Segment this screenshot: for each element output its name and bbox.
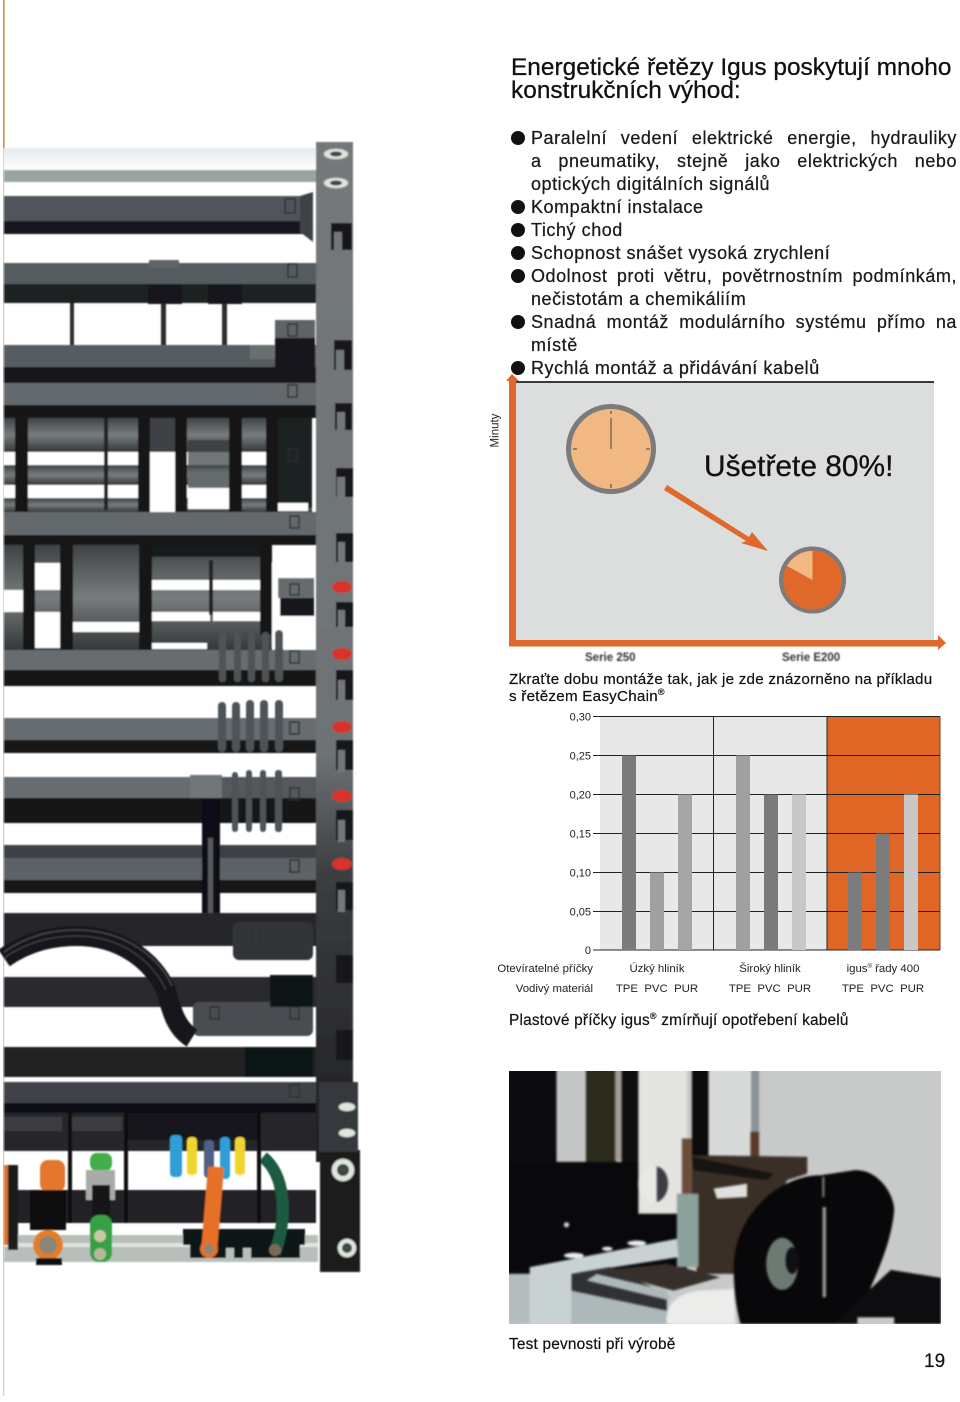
y axis values: 0,20 — [570, 790, 591, 802]
category labels: TPE PVC PUR — [842, 983, 924, 995]
chart: time saving clocks — [506, 374, 946, 664]
red markers — [332, 581, 352, 870]
side plate column — [316, 142, 360, 1272]
bullet: resistance: nečistotám a chemikáliím — [531, 289, 746, 309]
bar chart: cable wear — [497, 712, 940, 995]
chart caption: s řetězem EasyChain® — [509, 686, 665, 704]
bullet: fast cable fitting: Rychlá montáž a přidávání kabelů — [531, 358, 820, 378]
grey link and cable bundle lower — [4, 512, 316, 650]
category labels: TPE PVC PUR — [729, 983, 811, 995]
category labels: TPE PVC PUR — [616, 983, 698, 995]
y axis values: 0,15 — [570, 828, 591, 840]
chart panels — [600, 716, 940, 950]
arrow: saving — [664, 485, 768, 551]
category labels: Otevíratelné příčky — [497, 963, 593, 975]
y axis label: Minuty — [490, 414, 502, 447]
y axis values: 0,25 — [570, 750, 591, 762]
clock: after — [781, 548, 844, 612]
bullet: quiet operation: Tichý chod — [531, 220, 623, 240]
y axis values: 0,30 — [570, 712, 591, 724]
category labels: řady 400 — [872, 963, 919, 975]
y axis values: 0,10 — [570, 868, 591, 880]
photo: strength test — [509, 1071, 941, 1324]
category labels: Široký hliník — [739, 962, 801, 975]
y axis values: 0 — [585, 945, 591, 957]
bullet: resistance: Odolnost proti větru, povětrnostním podmínkám, — [531, 266, 957, 286]
chart caption — [509, 671, 932, 704]
bullet: resistance — [511, 266, 957, 309]
upper grey chain links — [4, 192, 316, 418]
bullet: modular assembly: Snadná montáž modulárního systému přímo na — [531, 312, 957, 332]
saving headline: Ušetřete 80%! — [704, 450, 893, 483]
mounting rail — [4, 1229, 318, 1262]
link end flares and window marks — [210, 199, 299, 1097]
bullet: modular assembly — [511, 312, 957, 355]
y axis values: 0,05 — [570, 906, 591, 918]
bullet: compact installation: Kompaktní instalace — [531, 197, 704, 217]
bullet: parallel routing: optických digitálních signálů — [531, 174, 770, 194]
category labels — [497, 962, 924, 995]
axes — [506, 374, 946, 650]
page number: 19 — [924, 1351, 945, 1372]
chart caption: Zkraťte dobu montáže tak, jak je zde znázorněno na příkladu — [509, 671, 932, 688]
category labels: igus — [847, 963, 867, 975]
category labels: ® — [867, 963, 872, 970]
heading: Energetické řetězy Igus poskytují mnoho — [511, 54, 951, 81]
dark lower links — [4, 913, 316, 1223]
cable bundle upper — [4, 414, 312, 512]
x axis labels: Serie E200 — [782, 652, 840, 664]
heading — [511, 54, 951, 104]
y axis values — [570, 712, 591, 957]
bullet: modular assembly: místě — [531, 335, 578, 355]
category labels: Úzký hliník — [629, 962, 685, 975]
bullet: parallel routing: a pneumatiky, stejně jako elektrických nebo — [531, 151, 957, 171]
plot background — [516, 382, 934, 640]
bullet: parallel routing: Paralelní vedení elektrické energie, hydrauliky — [531, 128, 957, 148]
photo caption: Test pevnosti při výrobě — [509, 1336, 675, 1353]
finned links — [4, 630, 316, 923]
category labels: Vodivý materiál — [516, 983, 593, 995]
bullet: high acceleration: Schopnost snášet vysoká zrychlení — [531, 243, 830, 263]
cables and clamps — [4, 1113, 283, 1265]
clock: before — [568, 406, 654, 492]
heading: konstrukčních výhod: — [511, 77, 741, 104]
chart conclusion: Plastové příčky igus® zmírňují opotřebení kabelů — [509, 1011, 849, 1029]
benefits list — [511, 128, 957, 378]
bullet: parallel routing — [511, 128, 957, 194]
x axis labels — [585, 652, 840, 664]
x axis labels: Serie 250 — [585, 652, 636, 664]
photo: energy chain assembly — [0, 0, 362, 1396]
bars — [622, 756, 918, 950]
